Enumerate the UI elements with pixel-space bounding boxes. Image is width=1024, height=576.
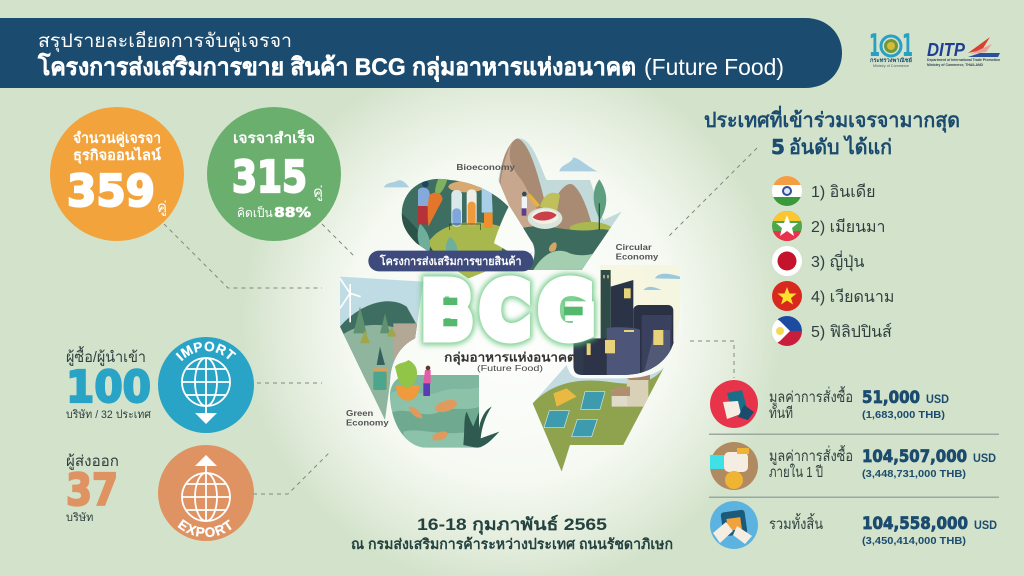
flag: Japan [772,246,802,276]
panel: program pill: โครงการส่งเสริมการขายสินค้า [379,254,521,268]
stat: online negotiations 359: จำนวนคู่เจรจา [73,130,161,147]
dashed connector lines [164,148,757,494]
icon: import globe [158,337,254,433]
stat: exporters 37: ผู้ส่งออก [66,453,119,470]
stat: buyers 100: ผู้ซื้อ/ผู้นำเข้า [66,346,146,366]
panel: program pill [368,251,533,271]
label: bioeconomy: Bioeconomy [456,162,515,172]
heading: top 5 countries: 5 [771,135,785,159]
stat: buyers 100: บริษัท / 32 ประเทศ [66,409,151,421]
heading: top 5 countries: ประเทศที่เข้าร่วมเจรจามากสุด [704,105,960,133]
future food caption: (Future Food) [477,363,543,373]
panel: future food aquaculture [390,375,480,448]
event date and venue: 16-18 กุมภาพันธ์ 2565 [417,514,607,535]
logo: 101 Ministry of Commerce: 1 [869,28,880,64]
panel: bioeconomy mountains [497,137,623,270]
stat: online negotiations 359: ธุรกิจออนไลน์ [73,146,161,164]
icon: cloud top left [384,180,409,187]
logo: DITP: DITP [927,40,966,60]
panel: immediate orders [710,380,949,428]
country label: Japan: 3) ญี่ปุ่น [811,250,864,272]
panel: immediate orders: (1,683,000 THB) [862,409,945,421]
logo: DITP: Department of International Trade Promotion [927,57,1000,62]
icon: lettuce bowl [395,360,431,401]
panel: orders within one year: (3,448,731,000 THB) [862,468,966,480]
header title: โครงการส่งเสริมการขาย สินค้า BCG กลุ่มอาหารแห่งอนาคต [37,52,636,83]
stat: online negotiations 359 [50,107,184,241]
panel: orders within one year: 104,507,000 [862,447,967,467]
panel: green economy hills [340,277,423,430]
header banner [0,18,842,88]
stat: successful negotiations 315: เจรจาสำเร็จ [233,128,315,147]
label: green economy: Economy [346,417,389,427]
stat: exporters 37: บริษัท [66,512,93,524]
stat: buyers 100: 100 [66,362,151,413]
stat: online negotiations 359: คู่ [157,199,167,216]
event date and venue [351,514,673,553]
country label: Vietnam: 4) เวียดนาม [811,288,894,306]
logo: 101 Ministry of Commerce [869,28,913,68]
logo: DITP: Ministry of Commerce, THAILAND [927,62,983,67]
icon: cloud top right [559,157,597,171]
meat dish [528,208,562,229]
icon: export globe [158,445,254,541]
heading: top 5 countries: อันดับ ได้แก่ [789,135,892,159]
panel: bioeconomy laboratory [402,178,534,278]
country label: India: 1) อินเดีย [811,183,875,201]
panel: immediate orders: มูลค่าการสั่งซื้อ [769,386,853,406]
stat: successful negotiations 315: คิดเป็น [237,205,273,220]
panel: orders within one year: มูลค่าการสั่งซื้อ [769,445,853,465]
lab coat person [482,188,493,213]
icon: tree [594,179,606,230]
label: green economy [346,408,389,427]
icon: export globe: EXPORT [178,519,232,538]
future food caption: กลุ่มอาหารแห่งอนาคต [444,351,576,366]
logo: 101 Ministry of Commerce: กระทรวงพาณิชย์ [870,57,912,64]
stat: successful negotiations 315: คู่ [313,184,323,201]
stat: buyers 100 [66,346,151,421]
panel: immediate orders: 51,000 [862,388,920,408]
panel: renewable energy fields [533,363,666,473]
country label: Philippines: 5) ฟิลิปปินส์ [811,322,892,341]
panel: orders within one year: USD [973,451,996,465]
stat: successful negotiations 315 [207,107,341,241]
icon: import globe: IMPORT [176,342,236,362]
stat: exporters 37: 37 [66,465,118,516]
panel: immediate orders: USD [926,392,949,406]
panel: white gap near lab [494,206,534,256]
farmer and carrot [418,188,432,207]
flag: Philippines [772,316,802,346]
label: circular economy: Circular [616,242,653,252]
logo: DITP [927,37,1000,67]
flag: Myanmar [772,211,802,241]
flag: Vietnam [772,281,802,311]
logo: 101 Ministry of Commerce: 1 [902,28,913,64]
label: green economy: Green [346,408,373,418]
flag: India [772,176,802,206]
header subtitle: สรุปรายละเอียดการจับคู่เจรจา [38,30,292,53]
central BCG recycling illustration [340,137,682,473]
heading: top 5 countries [704,105,960,159]
panel: orders within one year [710,442,996,490]
icon: seaweed tip [475,407,499,447]
header title suffix: (Future Food) [644,54,784,80]
panel: total orders: 104,558,000 [862,514,968,534]
event date and venue: ณ กรมส่งเสริมการค้าระหว่างประเทศ ถนนรัชดาภิเษก [351,536,673,553]
panel: total orders: (3,450,414,000 THB) [862,535,966,547]
scientist [522,197,527,209]
BCG letters: BCG [422,268,594,357]
label: circular economy: Economy [616,251,659,261]
label: circular economy [616,242,659,261]
future food caption [444,351,576,373]
panel: total orders [710,501,997,549]
panel: orders within one year: ภายใน 1 ปี [769,463,823,481]
stat: successful negotiations 315: 88% [274,206,311,221]
panel: total orders: USD [974,518,997,532]
country label: Myanmar: 2) เมียนมา [811,218,886,236]
panel: circular economy city [573,265,682,378]
panel: total orders: รวมทั้งสิ้น [769,513,823,533]
BCG glow: BCG [422,268,594,357]
panel: immediate orders: ทันที [769,405,793,422]
stat: online negotiations 359: 359 [67,166,155,217]
stat: successful negotiations 315: 315 [232,152,307,203]
logo: 101 Ministry of Commerce: Ministry of Commerce [873,63,910,68]
stat: exporters 37 [66,453,119,524]
